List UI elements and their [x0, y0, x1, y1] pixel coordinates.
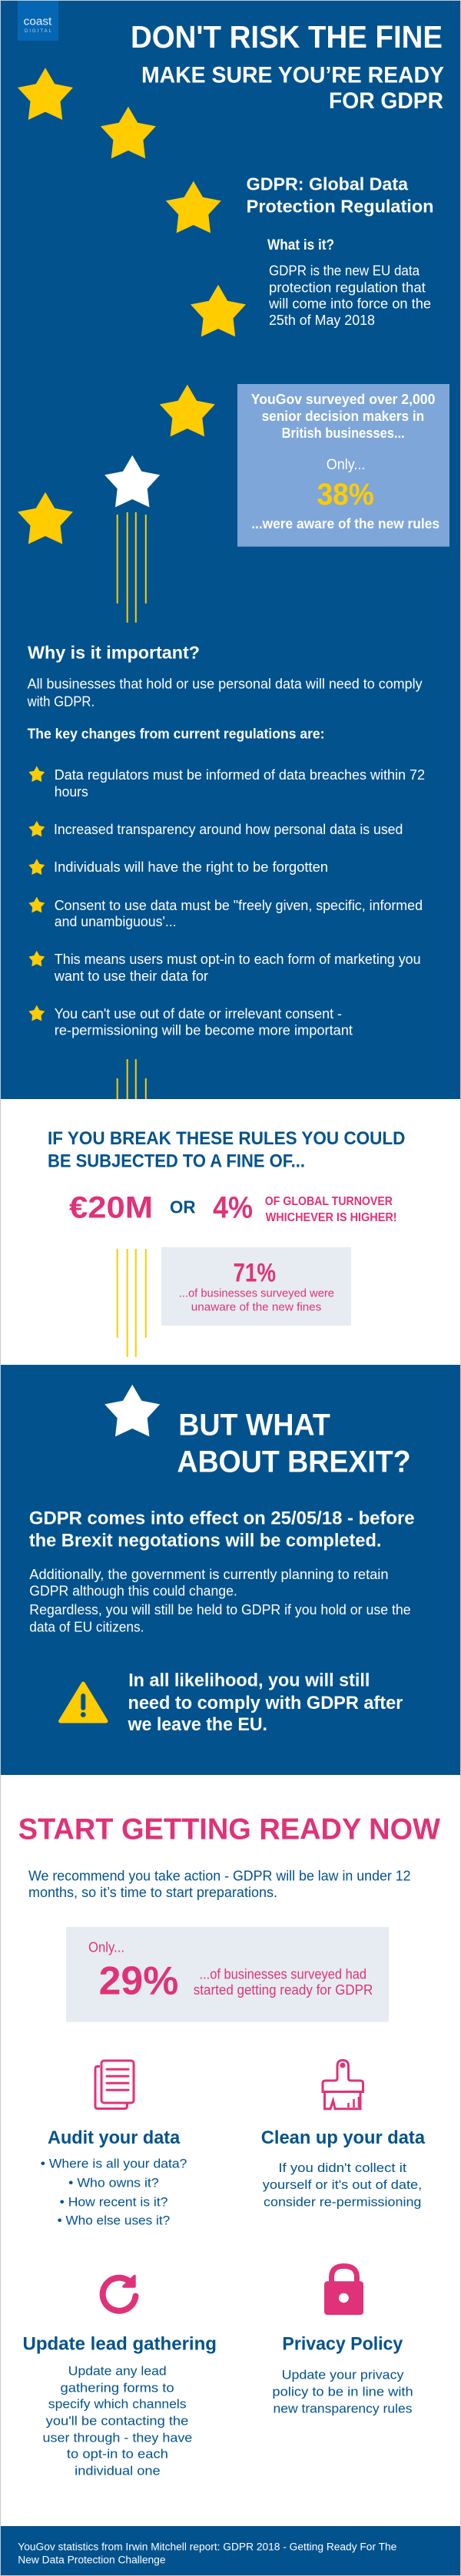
- text block: why is it important: All businesses that hold or use personal data will need to comply: [28, 677, 423, 692]
- heading: fine warning: IF YOU BREAK THESE RULES YOU COULD: [48, 1128, 405, 1149]
- callout: YouGov survey 38%: Only...: [327, 457, 365, 473]
- title: [131, 19, 444, 114]
- heading: GDPR definition: GDPR: Global Data: [247, 174, 408, 194]
- callout: YouGov survey 38%: [237, 384, 449, 547]
- icon: white shooting star: [104, 455, 160, 623]
- step: update lead gathering: specify which channels: [48, 2396, 187, 2412]
- step: privacy policy: Update your privacy: [282, 2368, 404, 2382]
- icon: padlock: [324, 2266, 363, 2315]
- step: update lead gathering: individual one: [75, 2463, 161, 2478]
- title: DON'T RISK THE FINE: [131, 19, 443, 55]
- text block: why is it important: The key changes from current regulations are:: [28, 727, 324, 742]
- list item: re-permissioning: You can't use out of date or irrelevant consent -: [55, 1006, 342, 1021]
- footer: source note: YouGov statistics from Irwin Mitchell report: GDPR 2018 - Getting Ready For The: [18, 2541, 396, 2552]
- step: update lead gathering: Update any lead: [68, 2364, 167, 2379]
- callout: 29% getting ready: started getting ready for GDPR: [194, 1982, 373, 1998]
- step: audit your data: • Who else uses it?: [58, 2213, 170, 2227]
- step: clean up your data: yourself or it's out of date,: [263, 2177, 422, 2192]
- text block: why is it important: Why is it important?: [28, 642, 200, 662]
- step: audit your data: [41, 2061, 187, 2227]
- callout: comply after brexit: we leave the EU.: [128, 1714, 267, 1735]
- step: update lead gathering: [23, 2276, 217, 2478]
- text block: brexit timing: the Brexit negotations will be completed.: [29, 1530, 381, 1551]
- callout: comply after brexit: need to comply with GDPR after: [128, 1693, 403, 1713]
- step: update lead gathering: to opt-in to each: [67, 2447, 168, 2462]
- text block: what is it: 25th of May 2018: [269, 313, 375, 328]
- step: clean up your data: [261, 2060, 426, 2209]
- text block: what is it: GDPR is the new EU data: [269, 263, 420, 278]
- heading: start getting ready now: START GETTING READY NOW: [18, 1813, 440, 1846]
- callout: 29% getting ready: ...of businesses surveyed had: [200, 1967, 366, 1982]
- list item: data breaches: hours: [55, 784, 88, 800]
- callout: YouGov survey 38%: British businesses...: [282, 425, 405, 441]
- step: privacy policy: Privacy Policy: [282, 2334, 403, 2355]
- list item: consent: Consent to use data must be "freely given, specific, informed: [55, 898, 423, 913]
- decoration: yellow trail lines top: [117, 1059, 147, 1099]
- step: update lead gathering: user through - they have: [43, 2430, 192, 2445]
- callout: 29% getting ready: 29%: [99, 1959, 178, 2004]
- callout: comply after brexit: [128, 1670, 403, 1735]
- step: audit your data: • Who owns it?: [68, 2176, 159, 2190]
- list item: consent: and unambiguous'...: [55, 914, 177, 929]
- text block: why is it important: [27, 642, 423, 742]
- icon: paint brush: [323, 2060, 363, 2109]
- title: MAKE SURE YOU’RE READY: [141, 63, 444, 88]
- callout: 29% getting ready: [66, 1927, 389, 2022]
- callout: YouGov survey 38%: YouGov surveyed over 2,000: [251, 392, 435, 407]
- text block: brexit detail: Regardless, you will still be held to GDPR if you hold or use the: [29, 1602, 411, 1617]
- text block: brexit timing: [29, 1508, 415, 1551]
- heading: fine warning: [48, 1128, 405, 1172]
- stat: fine amounts: [69, 1191, 397, 1225]
- panel: brexit: [1, 1365, 460, 1775]
- callout: 71% unaware: unaware of the new fines: [191, 1300, 321, 1313]
- heading: but what about brexit: [177, 1408, 411, 1479]
- list item: consent: [28, 897, 423, 929]
- decoration: yellow trail lines middle: [117, 1249, 147, 1357]
- step: privacy policy: new transparency rules: [274, 2401, 412, 2415]
- icon: warning triangle: [61, 1684, 106, 1721]
- text block: recommendation: months, so it’s time to start preparations.: [28, 1885, 277, 1900]
- step: audit your data: • How recent is it?: [60, 2194, 167, 2209]
- list: key changes: [28, 766, 425, 1038]
- step: clean up your data: If you didn't collect it: [278, 2160, 406, 2175]
- footer: source note: New Data Protection Challenge: [18, 2554, 166, 2565]
- text block: brexit detail: data of EU citizens.: [29, 1619, 144, 1634]
- stat: fine amounts: OF GLOBAL TURNOVER: [265, 1195, 393, 1208]
- logo: coast digital: [18, 1, 58, 41]
- callout: 29% getting ready: Only...: [88, 1940, 124, 1955]
- step: update lead gathering: you'll be contacting the: [46, 2414, 188, 2429]
- step: update lead gathering: Update lead gathering: [23, 2334, 217, 2355]
- step: privacy policy: [272, 2266, 413, 2415]
- step: clean up your data: Clean up your data: [261, 2127, 426, 2148]
- logo: coast digital: coast: [24, 15, 52, 28]
- text block: brexit detail: Additionally, the government is currently planning to retain: [29, 1567, 389, 1582]
- step: audit your data: • Where is all your data?: [41, 2157, 187, 2171]
- text block: what is it: [267, 237, 431, 328]
- list item: opt-in: This means users must opt-in to each form of marketing you: [55, 952, 421, 967]
- heading: but what about brexit: ABOUT BREXIT?: [177, 1445, 411, 1479]
- step: audit your data: Audit your data: [48, 2127, 181, 2148]
- text block: recommendation: We recommend you take action - GDPR will be law in under 12: [28, 1868, 411, 1883]
- heading: GDPR definition: [247, 174, 433, 217]
- callout: YouGov survey 38%: senior decision makers in: [262, 409, 424, 424]
- text block: recommendation: [28, 1868, 411, 1900]
- callout: 71% unaware: [161, 1247, 351, 1326]
- text block: what is it: protection regulation that: [269, 280, 426, 295]
- stat: fine amounts: 4%: [213, 1191, 253, 1225]
- logo: coast digital: DIGITAL: [25, 29, 52, 34]
- list item: data breaches: Data regulators must be informed of data breaches within 72: [55, 767, 425, 783]
- text block: brexit detail: GDPR although this could change.: [29, 1583, 237, 1598]
- list item: re-permissioning: re-permissioning will be become more important: [55, 1023, 353, 1038]
- list item: data breaches: [28, 766, 425, 800]
- icon: white star: [104, 1385, 160, 1436]
- stat: fine amounts: WHICHEVER IS HIGHER!: [266, 1211, 397, 1224]
- title: FOR GDPR: [329, 88, 443, 114]
- list item: opt-in: [28, 951, 421, 984]
- callout: YouGov survey 38%: ...were aware of the new rules: [251, 516, 439, 531]
- icon: documents: [95, 2061, 134, 2109]
- footer: source note: [18, 2541, 396, 2565]
- text block: brexit timing: GDPR comes into effect on 25/05/18 - before: [29, 1508, 415, 1528]
- stat: fine amounts: OR: [170, 1197, 196, 1217]
- stat: fine amounts: €20M: [69, 1191, 153, 1225]
- icon: refresh arrow: [103, 2276, 135, 2311]
- text block: brexit detail: [29, 1567, 411, 1634]
- panel: intro and why it matters: [1, 1, 460, 1099]
- list item: transparency: Increased transparency around how personal data is used: [54, 822, 403, 837]
- icon: star trail: [18, 68, 246, 544]
- step: update lead gathering: gathering forms to: [60, 2380, 174, 2395]
- step: clean up your data: consider re-permissioning: [264, 2194, 421, 2209]
- panel: footer background: [1, 2526, 460, 2575]
- step: privacy policy: policy to be in line with: [272, 2384, 413, 2399]
- heading: GDPR definition: Protection Regulation: [247, 197, 433, 217]
- callout: 71% unaware: ...of businesses surveyed were: [179, 1286, 334, 1300]
- callout: comply after brexit: In all likelihood, you will still: [128, 1670, 370, 1691]
- text block: what is it: What is it?: [267, 237, 334, 253]
- list item: opt-in: want to use their data for: [54, 968, 208, 984]
- heading: fine warning: BE SUBJECTED TO A FINE OF...: [48, 1151, 305, 1172]
- list item: re-permissioning: [28, 1005, 353, 1038]
- callout: 71% unaware: 71%: [234, 1258, 276, 1287]
- list item: right to be forgotten: Individuals will have the right to be forgotten: [54, 859, 328, 875]
- text block: what is it: will come into force on the: [268, 296, 431, 311]
- text block: why is it important: with GDPR.: [27, 694, 95, 709]
- heading: but what about brexit: BUT WHAT: [178, 1408, 330, 1442]
- callout: YouGov survey 38%: 38%: [317, 478, 374, 512]
